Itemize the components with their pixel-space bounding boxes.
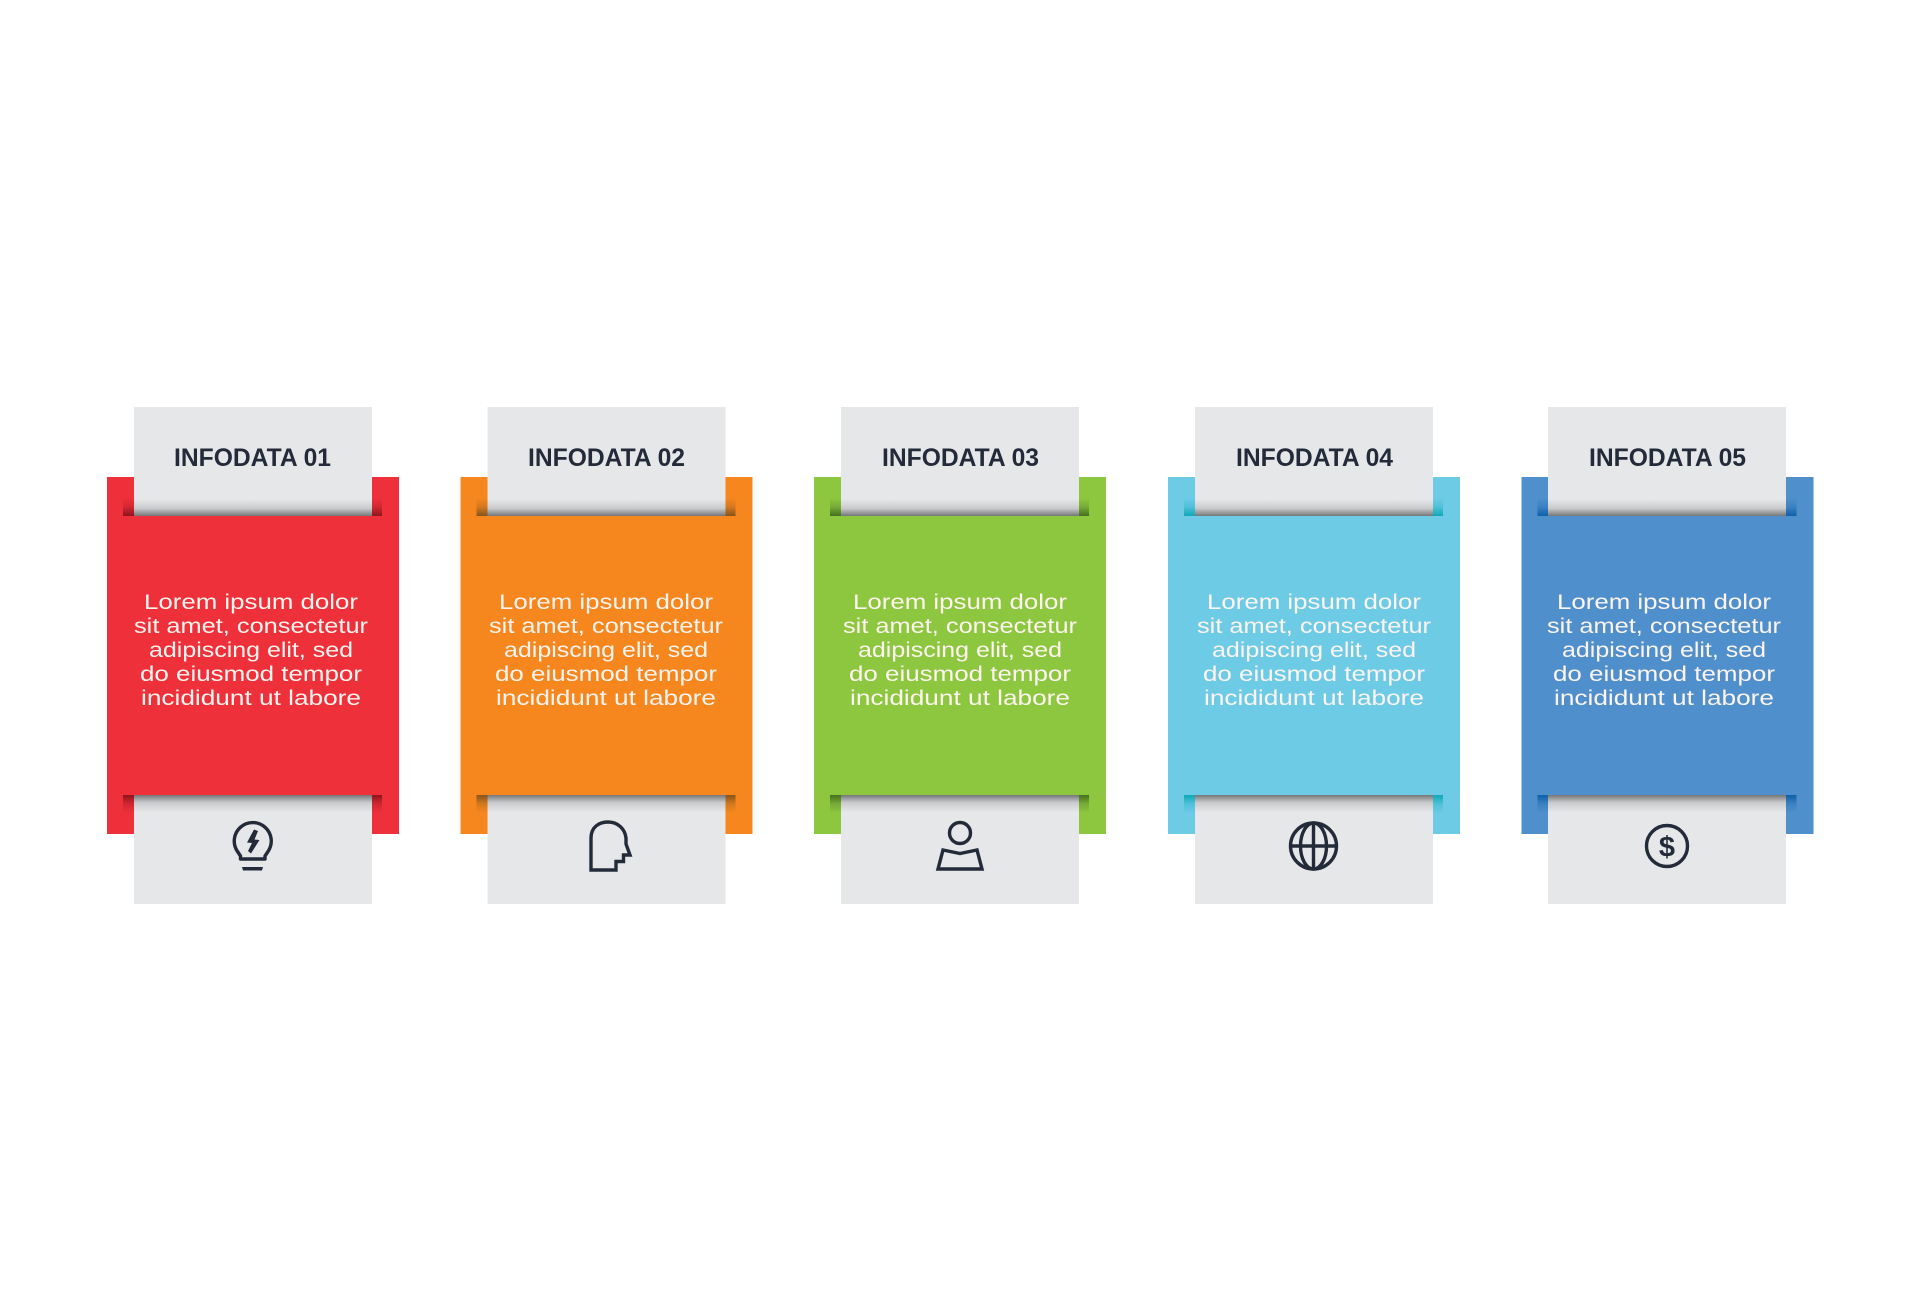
body text: do eiusmod tempor — [1553, 663, 1775, 686]
icon: dollar coin — [1646, 826, 1688, 866]
icon: light bulb — [234, 823, 271, 870]
bottom slit shading — [1184, 795, 1443, 813]
top slit shading — [476, 498, 736, 516]
top slit shading — [1184, 498, 1443, 516]
header tab — [488, 407, 726, 516]
body text: do eiusmod tempor — [140, 663, 362, 686]
body text: adipiscing elit, sed — [504, 639, 708, 662]
front panel — [1522, 516, 1814, 795]
bottom slit shading — [1538, 795, 1796, 813]
icon: globe — [1290, 823, 1336, 869]
heading: INFODATA 04 — [1236, 444, 1393, 472]
body text: adipiscing elit, sed — [1212, 639, 1416, 662]
body text: Lorem ipsum dolor — [499, 591, 713, 614]
tab shadow top — [841, 499, 1079, 516]
tab shadow top — [134, 499, 372, 516]
icon: person on map — [938, 822, 982, 869]
footer tab — [488, 795, 726, 904]
body text: sit amet, consectetur — [843, 615, 1077, 638]
header tab — [1548, 407, 1786, 516]
icon: dollar coin: $ — [1659, 832, 1675, 864]
tab shadow bottom — [1195, 795, 1433, 812]
tab shadow top — [1548, 499, 1786, 516]
orange band — [460, 477, 752, 834]
body text — [489, 591, 723, 710]
header tab — [1195, 407, 1433, 516]
body text: sit amet, consectetur — [134, 615, 368, 638]
body text: sit amet, consectetur — [1197, 615, 1431, 638]
body text: do eiusmod tempor — [495, 663, 717, 686]
light blue band — [1168, 477, 1460, 834]
heading: INFODATA 01 — [174, 444, 331, 472]
bottom slit shading — [830, 795, 1089, 813]
panel: infodata 03 — [814, 407, 1106, 904]
body text: incididunt ut labore — [496, 687, 716, 710]
front panel — [107, 516, 399, 795]
header tab — [134, 407, 372, 516]
body text: Lorem ipsum dolor — [1207, 591, 1421, 614]
top slit shading — [1538, 498, 1796, 516]
bottom slit shading — [476, 795, 736, 813]
front panel — [460, 516, 752, 795]
panel: infodata 02 — [460, 407, 752, 904]
heading: INFODATA 05 — [1589, 444, 1746, 472]
panel: infodata 01 — [107, 407, 399, 904]
front panel — [814, 516, 1106, 795]
footer tab — [841, 795, 1079, 904]
front panel — [1168, 516, 1460, 795]
tab shadow bottom — [488, 795, 726, 812]
body text — [134, 591, 368, 710]
panel: infodata 05 — [1522, 407, 1814, 904]
body text: Lorem ipsum dolor — [1557, 591, 1771, 614]
top slit shading — [123, 498, 382, 516]
panel: infodata 04 — [1168, 407, 1460, 904]
red band — [107, 477, 399, 834]
header tab — [841, 407, 1079, 516]
tab shadow bottom — [841, 795, 1079, 812]
top slit shading — [830, 498, 1089, 516]
body text — [843, 591, 1077, 710]
tab shadow top — [1195, 499, 1433, 516]
body text: sit amet, consectetur — [489, 615, 723, 638]
footer tab — [1195, 795, 1433, 904]
body text: Lorem ipsum dolor — [853, 591, 1067, 614]
heading: INFODATA 03 — [882, 444, 1039, 472]
footer tab — [134, 795, 372, 904]
footer tab — [1548, 795, 1786, 904]
icon: head profile — [591, 822, 630, 870]
tab shadow bottom — [1548, 795, 1786, 812]
body text: incididunt ut labore — [141, 687, 361, 710]
bottom slit shading — [123, 795, 382, 813]
body text: incididunt ut labore — [1554, 687, 1774, 710]
body text: adipiscing elit, sed — [149, 639, 353, 662]
body text: adipiscing elit, sed — [1562, 639, 1766, 662]
heading: INFODATA 02 — [528, 444, 685, 472]
green band — [814, 477, 1106, 834]
body text: do eiusmod tempor — [1203, 663, 1425, 686]
tab shadow bottom — [134, 795, 372, 812]
body text: incididunt ut labore — [850, 687, 1070, 710]
tab shadow top — [488, 499, 726, 516]
body text: adipiscing elit, sed — [858, 639, 1062, 662]
body text — [1547, 591, 1781, 710]
body text: sit amet, consectetur — [1547, 615, 1781, 638]
body text: incididunt ut labore — [1204, 687, 1424, 710]
body text: Lorem ipsum dolor — [144, 591, 358, 614]
blue band — [1522, 477, 1814, 834]
body text: do eiusmod tempor — [849, 663, 1071, 686]
body text — [1197, 591, 1431, 710]
